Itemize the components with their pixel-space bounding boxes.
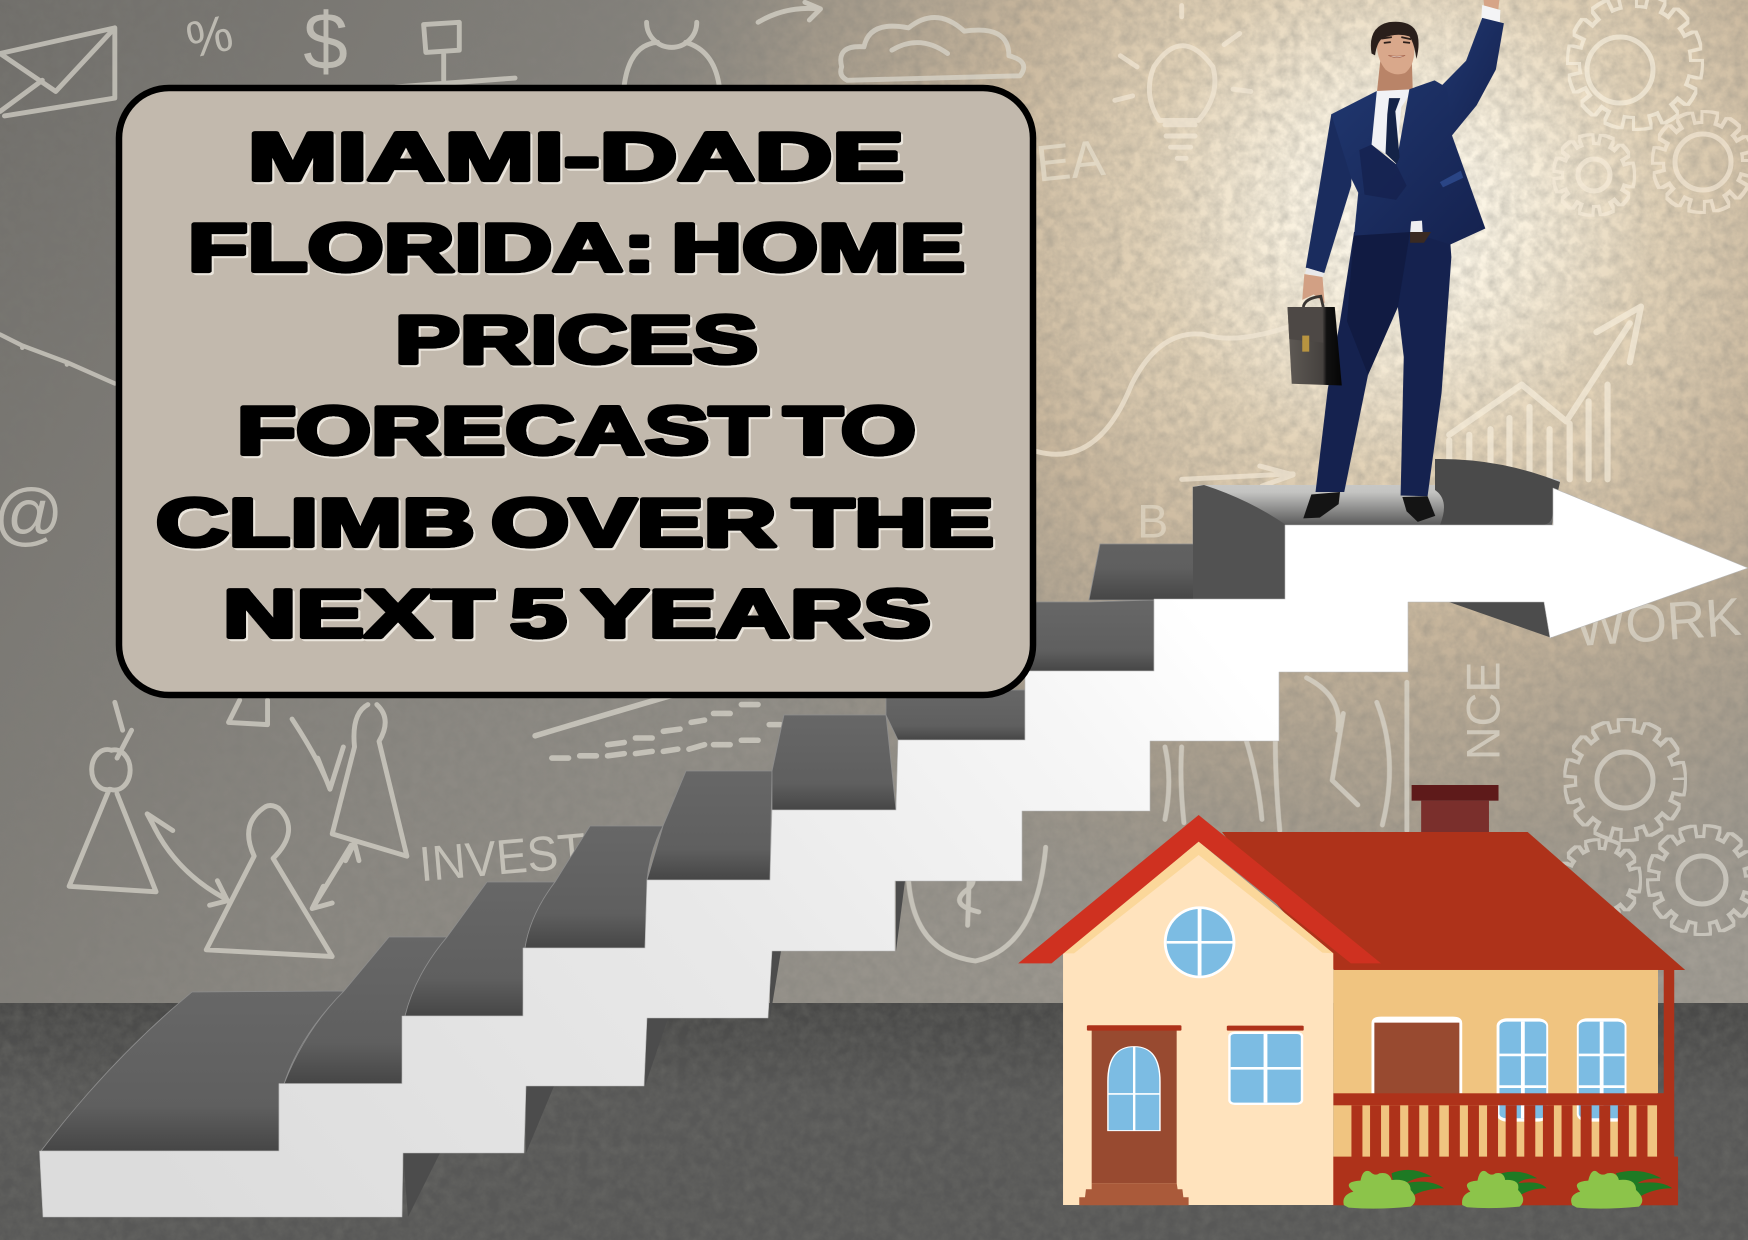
left arm: [1306, 114, 1352, 273]
doodle: INVEST letters: INVEST: [417, 824, 588, 892]
white stair front and arrow: [40, 488, 1748, 1217]
doodle: coin circle: [909, 847, 1046, 961]
gear inner ring center: [1578, 159, 1610, 191]
gear lower two ring: [1678, 856, 1726, 904]
front door: [1087, 1025, 1181, 1183]
doodle: small line upper right: [1182, 466, 1293, 486]
doodle: people diagram: [69, 700, 407, 956]
head: [1377, 31, 1414, 74]
porch window left: [1497, 1018, 1548, 1122]
main roof: [1222, 832, 1685, 970]
doodle: letter B: B: [1137, 495, 1168, 547]
doodle: data dashes: [535, 680, 780, 758]
staircase with arrow: [40, 459, 1748, 1217]
smile: [1388, 55, 1405, 58]
doodle: left line with dots: [0, 334, 115, 383]
gear center: [1561, 142, 1627, 208]
porch window right: [1577, 1018, 1626, 1122]
raised cuff: [1481, 5, 1500, 26]
bush one: [1343, 1170, 1444, 1209]
doodle: cloud: [841, 17, 1024, 80]
neck: [1377, 61, 1413, 94]
landing back step: [1435, 459, 1560, 525]
doodle: top person: [624, 22, 719, 85]
doodle: gears: [1561, 4, 1748, 926]
title text: FLORIDA: HOME: [188, 210, 965, 286]
bush two: [1462, 1171, 1547, 1208]
hair: [1371, 22, 1419, 59]
businessman: [1288, 0, 1504, 522]
bush three: [1571, 1171, 1672, 1209]
jacket: [1331, 80, 1485, 245]
doodle: WORK letters: WORK: [1573, 588, 1743, 658]
gable roof: [1018, 815, 1381, 963]
gear inner ring right: [1675, 134, 1731, 190]
jacket pocket flap: [1440, 171, 1463, 187]
railing: [1332, 1093, 1678, 1205]
title text: CLIMB OVER THE: [156, 485, 994, 561]
eyes and brows: [1381, 37, 1411, 43]
gear lower three: [1567, 847, 1633, 913]
briefcase flap: [1288, 307, 1323, 343]
left cuff: [1305, 268, 1325, 277]
background: floor: [0, 1003, 1748, 1240]
porch door: [1371, 1017, 1462, 1094]
briefcase clasp: [1302, 336, 1309, 352]
chimney cap: [1412, 785, 1499, 801]
title text: PRICES: [395, 302, 758, 378]
top landing: [1193, 459, 1560, 525]
title text: MIAMI-DADE: [248, 119, 904, 195]
shirt: [1372, 89, 1413, 161]
doodle: percent sign: %: [181, 4, 238, 69]
left shoe: [1303, 492, 1340, 518]
gear large top: [1577, 4, 1693, 120]
landing side shadow: [1193, 485, 1286, 600]
title text: [156, 119, 994, 652]
house: [1018, 785, 1685, 1209]
right shoe: [1402, 496, 1435, 522]
gable wall: [1063, 842, 1333, 1205]
front window: [1227, 1026, 1304, 1105]
title text: NEXT 5 YEARS: [223, 576, 931, 652]
stair undersides: [403, 602, 1552, 1217]
raised arm: [1442, 18, 1504, 137]
porch post: [1664, 970, 1674, 1157]
trousers: [1316, 232, 1451, 496]
bushes: [1343, 1170, 1672, 1209]
doodle: light bulb: [1115, 6, 1251, 158]
gear lower two: [1656, 834, 1748, 926]
doodle: sign post: [396, 22, 515, 87]
title text: FORECAST TO: [237, 393, 916, 469]
porch wall: [1333, 970, 1658, 1157]
gear lower one ring: [1597, 752, 1653, 808]
briefcase handle: [1303, 296, 1323, 307]
gear right top: [1661, 120, 1745, 204]
doodle: wavy line: [1037, 323, 1299, 454]
gable eave shading: [1063, 842, 1333, 953]
trouser shading: [1347, 232, 1410, 375]
doodle: ties: [1165, 678, 1407, 831]
tie: [1386, 98, 1400, 164]
belt: [1410, 232, 1431, 243]
gear inner ring top: [1587, 37, 1653, 103]
round window: [1164, 906, 1235, 978]
panel background: [119, 88, 1033, 695]
title panel: [119, 88, 1033, 695]
briefcase: [1288, 307, 1342, 386]
door steps: [1079, 1183, 1189, 1205]
chimney body: [1421, 801, 1489, 833]
stair treads: [41, 486, 1286, 1151]
raised hand: [1484, 0, 1499, 10]
left hand: [1302, 274, 1325, 303]
doodle: growth chart: [1449, 307, 1641, 479]
waist shirt: [1410, 221, 1423, 233]
doodle: EA letters: EA: [1033, 129, 1108, 193]
gear lower one: [1573, 728, 1677, 832]
doodle: NCE letters: NCE: [1457, 661, 1509, 760]
wall doodles: [0, 0, 1743, 961]
jacket lapel shading: [1359, 145, 1407, 200]
doodle: small arrow: [758, 2, 820, 22]
doodle: envelope: [0, 28, 115, 116]
